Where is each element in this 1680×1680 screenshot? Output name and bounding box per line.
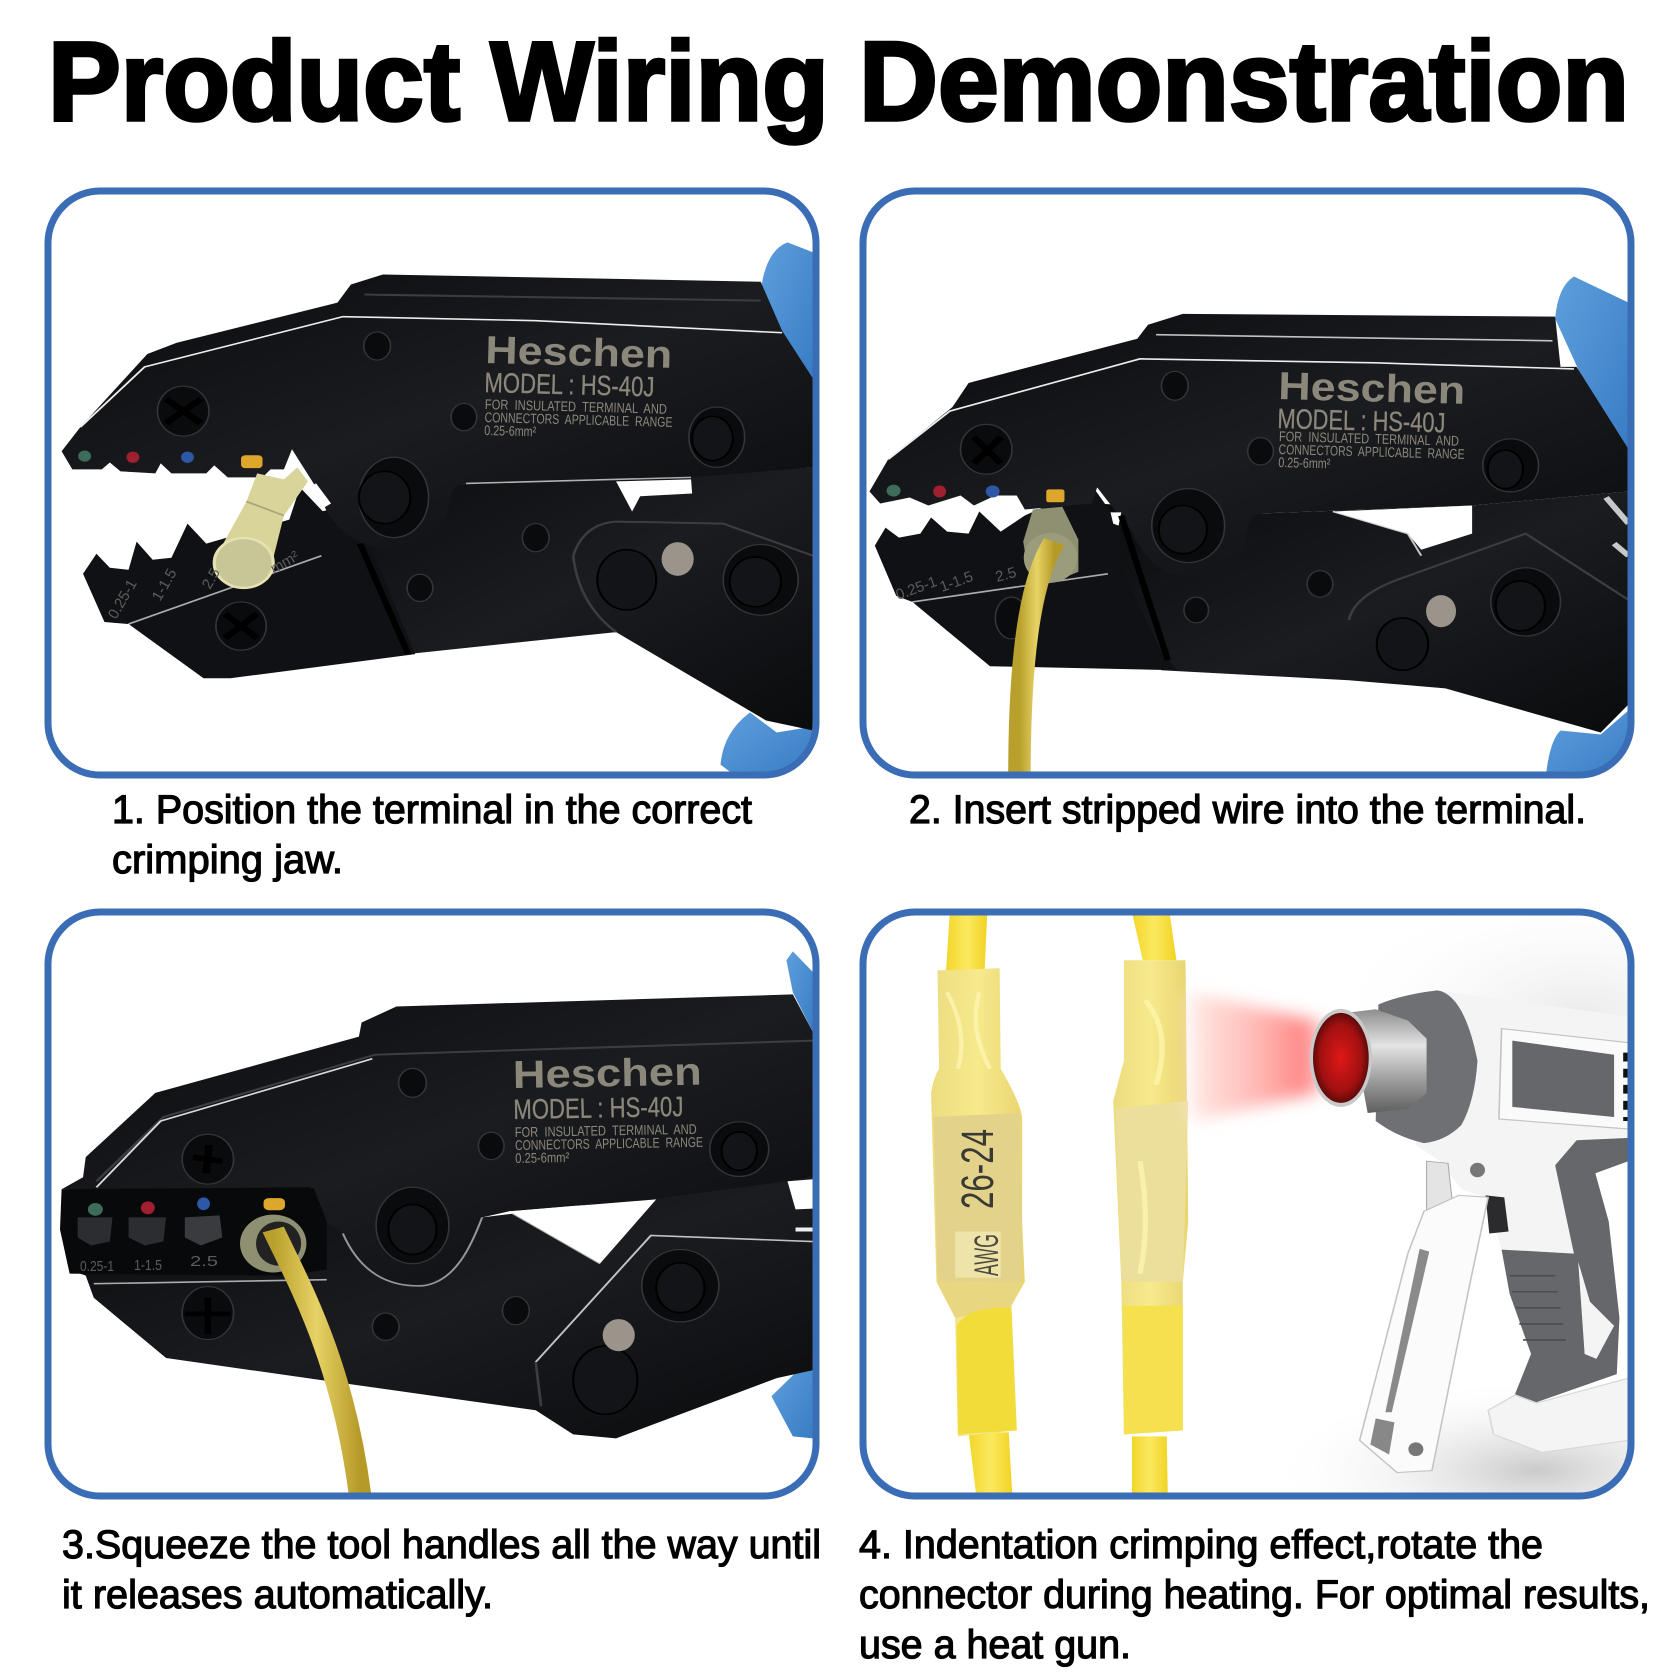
jaw block: [60, 1187, 327, 1276]
window gap: [616, 479, 692, 512]
caption: step 1: 1. Position the terminal in the correct: [112, 788, 752, 832]
battery base: [1488, 1378, 1629, 1452]
caption: step 2: 2. Insert stripped wire into the terminal.: [909, 788, 1586, 832]
colour dots: [887, 485, 901, 497]
tool engraving: CONNECTORS APPLICABLE RANGE: [484, 409, 673, 430]
background corner shade: [1322, 880, 1680, 1145]
jaw size labels: [80, 1253, 218, 1275]
jaw size labels: [894, 564, 1018, 604]
terminal and yellow wire: [1023, 507, 1078, 582]
tool engraving: FOR INSULATED TERMINAL AND: [515, 1121, 697, 1140]
jaw size labels: [105, 548, 302, 622]
tool engraving: MODEL : HS-40J: [1277, 403, 1446, 438]
yellow terminal: [223, 468, 308, 580]
colour dots: [88, 1203, 103, 1216]
highlights: [80, 317, 782, 427]
tool engraving: Heschen: [485, 329, 673, 377]
panel border: [863, 191, 1631, 775]
bolts: [364, 332, 391, 360]
silver barrel: [1349, 1009, 1427, 1113]
jaw size labels: 0.25-1: [80, 1258, 114, 1275]
tool engraving: FOR INSULATED TERMINAL AND: [1279, 428, 1459, 449]
tool engraving: Heschen: [1278, 365, 1466, 413]
panel border: [48, 191, 816, 775]
heat gun: [1310, 990, 1629, 1473]
right connector after heating: [1113, 912, 1188, 1499]
bolts: [1161, 371, 1188, 400]
grip ridges: [1510, 1276, 1566, 1340]
upper arm: [62, 274, 813, 550]
panel: step 4 heat shrink: [863, 880, 1680, 1563]
tool engraving: FOR INSULATED TERMINAL AND: [485, 396, 667, 417]
panel: step 2 insert wire: [863, 191, 1635, 775]
photo area: [931, 880, 1680, 1563]
lower body: [70, 1177, 813, 1438]
throat gap: [314, 483, 331, 508]
lower handle: [300, 467, 813, 731]
grey grip: [1502, 1138, 1629, 1402]
highlights: [888, 359, 1574, 459]
terminal and yellow wire: [240, 1215, 306, 1272]
bolts: [399, 1068, 426, 1097]
caption: step 4: use a heat gun.: [859, 1623, 1131, 1667]
lower handle: [1097, 491, 1629, 733]
panel: step 3 squeeze handles: [48, 912, 816, 1496]
lower jaw: [83, 487, 415, 678]
upper arm: [62, 994, 812, 1218]
blue top grip: [786, 951, 813, 1033]
tool engraving: [1276, 365, 1467, 475]
caption: step 3: 3.Squeeze the tool handles all the way until: [62, 1523, 821, 1567]
tool engraving: CONNECTORS APPLICABLE RANGE: [515, 1134, 703, 1153]
tool engraving: [512, 1051, 703, 1166]
vents: [1620, 1053, 1632, 1121]
throat gap: [1111, 512, 1121, 526]
panel: step 1 position terminal: [48, 191, 816, 775]
tool engraving: 0.25-6mm²: [515, 1149, 570, 1166]
highlights: [96, 1041, 813, 1181]
display: [1512, 1041, 1614, 1117]
white housing: [1416, 990, 1629, 1254]
grey muzzle collar: [1376, 990, 1477, 1143]
caption: step 1: crimping jaw.: [112, 838, 343, 882]
tool engraving: MODEL : HS-40J: [484, 367, 655, 402]
tool engraving: 0.25-6mm²: [484, 422, 537, 439]
hinge spring: [1606, 497, 1629, 556]
crimping tool with wire inserted: [869, 276, 1635, 775]
jaw size labels: 2.5: [994, 564, 1018, 586]
caption: step 4: 4. Indentation crimping effect,rotate the: [859, 1523, 1543, 1567]
jaw size labels: 1-1.5: [149, 566, 181, 604]
panel border: [48, 912, 816, 1496]
folding stand: [1360, 1195, 1488, 1473]
colour dots: [78, 450, 91, 462]
printed marking background: [955, 1231, 1001, 1278]
jaw size labels: 2.5: [199, 565, 224, 592]
printed gauge marking: 26-24: [952, 1129, 1003, 1209]
printed AWG marking: AWG: [968, 1234, 1006, 1276]
window gap: [1333, 506, 1472, 550]
tool engraving: MODEL : HS-40J: [513, 1091, 684, 1125]
tool engraving: 0.25-6mm²: [1278, 454, 1331, 471]
blue top grip: [761, 242, 813, 383]
lower jaw: [875, 485, 1177, 670]
die cavities: [78, 1217, 112, 1246]
blue top grip: [1555, 276, 1629, 451]
jaw size labels: 2.5: [190, 1253, 218, 1270]
side panel: [1499, 1029, 1629, 1129]
floor shadow: [1269, 1378, 1680, 1563]
caption: step 3: it releases automatically.: [62, 1573, 493, 1617]
jaw size labels: mm²: [268, 548, 302, 577]
tool engraving: Heschen: [512, 1051, 702, 1097]
title: Product Wiring Demonstration: [48, 19, 1629, 144]
trigger: [1486, 1195, 1509, 1233]
tool engraving: CONNECTORS APPLICABLE RANGE: [1278, 441, 1465, 462]
jaw size labels: 0.25-1: [894, 573, 939, 604]
hinge block: [1427, 1161, 1453, 1211]
blue bottom grip: [721, 712, 813, 775]
crimping tool closed: [60, 951, 813, 1495]
windows: [509, 1199, 656, 1264]
panel border: [863, 912, 1631, 1496]
jaw size labels: 0.25-1: [105, 577, 141, 622]
left connector before heating: [931, 912, 1025, 1499]
grip white sliver: [1578, 1262, 1614, 1359]
blue bottom grip: [1546, 711, 1628, 772]
tool engraving: [483, 329, 675, 443]
blue bottom grip: [772, 1370, 812, 1438]
crimping tool with terminal in jaw: [62, 242, 813, 775]
caption: step 3: [62, 1523, 821, 1617]
upper arm: [870, 314, 1628, 548]
caption: step 4: connector during heating. For optimal results,: [859, 1573, 1650, 1617]
jaw size labels: 1-1.5: [134, 1257, 162, 1274]
heat cone: [1191, 992, 1317, 1121]
caption: step 4: [859, 1523, 1650, 1667]
jaw size labels: 1-1.5: [938, 568, 976, 596]
caption: step 1: [112, 788, 752, 882]
